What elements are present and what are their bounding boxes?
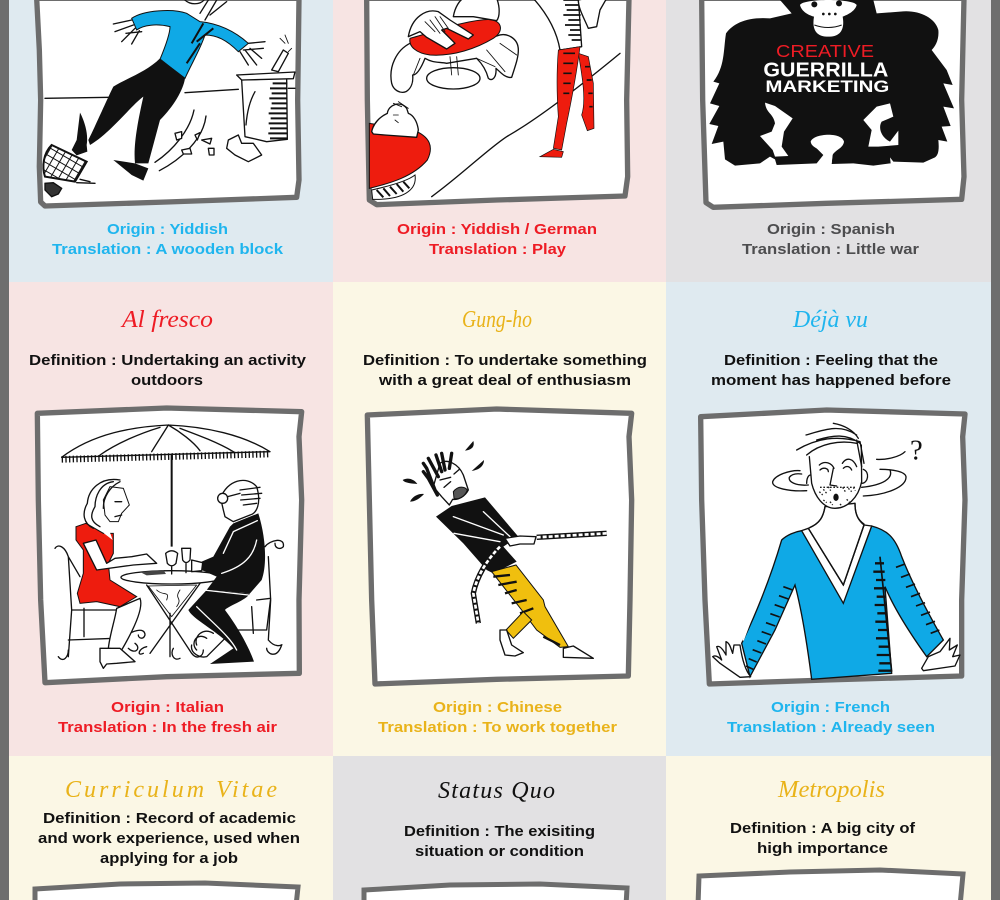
title: Status Quo	[438, 778, 555, 804]
origin and translation: Origin : French	[771, 699, 890, 716]
definition: moment has happened before	[711, 372, 951, 389]
definition: with a great deal of enthusiasm	[378, 372, 631, 389]
title: Al fresco	[120, 307, 213, 333]
definition: Definition : The exisiting	[404, 823, 595, 840]
origin and translation	[378, 699, 617, 736]
illustration: gorilla with creative guerrilla marketing logo	[702, 0, 964, 207]
illustration frame	[364, 884, 627, 900]
sweat drops	[403, 441, 484, 502]
illustration: cafe scene with red tables	[367, 0, 629, 205]
hatching	[873, 563, 892, 671]
panel: Metropolis	[666, 756, 991, 900]
panel: Deja vu	[666, 282, 991, 756]
table	[139, 583, 207, 659]
illustration: confused man with swirls round his head	[701, 410, 965, 684]
hair	[797, 423, 864, 467]
origin and translation: Translation : To work together	[378, 719, 617, 736]
title: Curriculum Vitae	[65, 777, 277, 803]
woman	[55, 546, 117, 659]
logo text: CREATIVE	[776, 41, 874, 61]
title: Metropolis	[777, 777, 885, 803]
illustration frame	[35, 883, 298, 900]
illustration: confused man with swirls round his head: ?	[910, 434, 923, 466]
definition: high importance	[757, 840, 888, 857]
definition: Definition : Record of academic	[43, 810, 296, 827]
panel: Gung-ho	[333, 282, 666, 756]
definition	[711, 352, 951, 389]
panel: Al fresco	[9, 282, 333, 756]
definition: outdoors	[131, 372, 203, 389]
illustration: man pulling a rope	[367, 409, 632, 684]
origin and translation	[397, 221, 597, 258]
origin and translation	[52, 221, 284, 258]
hands	[713, 642, 751, 677]
definition	[730, 820, 916, 857]
definition	[363, 352, 647, 389]
definition: Definition : To undertake something	[363, 352, 647, 369]
definition: situation or condition	[415, 843, 584, 860]
origin and translation	[58, 699, 277, 736]
definition: Definition : Undertaking an activity	[29, 352, 307, 369]
logo text	[763, 41, 889, 96]
sweater	[742, 526, 943, 679]
swirl	[773, 452, 906, 496]
origin and translation: Translation : Play	[429, 241, 567, 258]
logo text: MARKETING	[765, 77, 889, 96]
neck and head	[808, 503, 864, 585]
title: Déjà vu	[792, 307, 868, 333]
origin and translation: Origin : Yiddish	[107, 221, 228, 238]
origin and translation: Origin : Italian	[111, 699, 224, 716]
panel: Curriculum Vitae	[9, 756, 333, 900]
illustration: man falling over a bin	[37, 0, 299, 206]
origin and translation	[727, 699, 935, 736]
origin and translation: Translation : In the fresh air	[58, 719, 277, 736]
origin and translation: Origin : Spanish	[767, 221, 895, 238]
origin and translation	[742, 221, 919, 258]
origin and translation: Origin : Yiddish / German	[397, 221, 597, 238]
origin and translation: Translation : A wooden block	[52, 241, 284, 258]
definition	[29, 352, 307, 389]
panel: Status Quo	[333, 756, 666, 900]
panel: Klutz (top left)	[9, 0, 333, 282]
illustration: couple at a cafe table under a parasol	[37, 408, 302, 683]
origin and translation: Origin : Chinese	[433, 699, 562, 716]
origin and translation: Translation : Already seen	[727, 719, 935, 736]
definition	[38, 810, 300, 867]
definition: Definition : A big city of	[730, 820, 916, 837]
logo text: GUERRILLA	[763, 58, 888, 81]
panel: Spiel (top middle)	[333, 0, 666, 282]
man	[191, 540, 283, 657]
title: Gung-ho	[462, 307, 532, 333]
illustration frame	[698, 870, 963, 900]
definition: and work experience, used when	[38, 830, 300, 847]
panel: Guerrilla (top right)	[666, 0, 991, 282]
definition: Definition : Feeling that the	[724, 352, 938, 369]
origin and translation: Translation : Little war	[742, 241, 919, 258]
definition	[404, 823, 595, 860]
definition: applying for a job	[100, 850, 238, 867]
